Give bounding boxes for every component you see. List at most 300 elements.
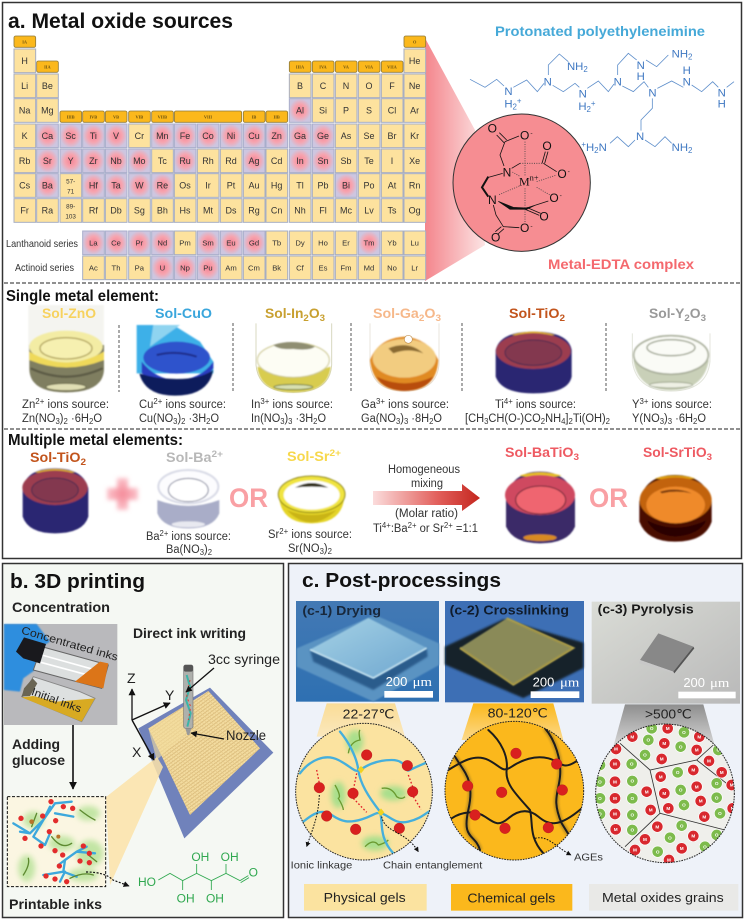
periodic table: Mn (156, 131, 169, 141)
arrow: inks to glucose step (72, 725, 74, 789)
legend: Chemical gels: Chemical gels (467, 891, 555, 905)
photo: concentrated and initial inks (4, 624, 120, 725)
periodic table: Ga (294, 131, 306, 141)
periodic table: P (343, 106, 349, 116)
periodic table: Fr (20, 206, 29, 216)
sample: Sol-Sr2+: Sol-Sr 2+ (287, 448, 342, 464)
circle: metal oxide grains: M (614, 747, 618, 752)
periodic table: Kr (410, 131, 419, 141)
coordinate axes: Z (127, 670, 136, 686)
sample: Sol-Ga2O3: Ga3+ ions source: (361, 397, 449, 411)
circle: metal oxide grains: M (666, 806, 670, 811)
circle: metal oxide grains (594, 723, 738, 866)
periodic table: Nb (110, 156, 122, 166)
legend: Physical gels (304, 884, 427, 911)
periodic table: As (341, 131, 352, 141)
circle: metal oxide grains: O (703, 844, 707, 849)
periodic table: V (113, 131, 119, 141)
circle: metal oxide grains: M (702, 814, 706, 819)
periodic table: Tc (158, 156, 167, 166)
periodic table: Dy (295, 239, 305, 248)
callout arrow: ionic linkage (307, 795, 319, 847)
legend: Physical gels: Physical gels (324, 891, 406, 905)
arrow: homogeneous mixing: Ti4+:Ba2+ or Sr2+ =1:1 (373, 521, 478, 535)
circle: metal oxide grains: O (647, 738, 651, 743)
chemical structure: polyethyleneimine: H2+ (504, 96, 522, 112)
periodic table: VIA (365, 65, 374, 70)
circle: metal oxide grains: O (630, 762, 634, 767)
periodic table: Tl (296, 181, 304, 191)
periodic table: Ca (42, 131, 53, 141)
periodic table: Mo (133, 156, 146, 166)
sample: Sol-ZnO: Sol-ZnO (42, 306, 96, 321)
photo c-2: crosslinking: μm (560, 675, 579, 690)
periodic table: Tb (272, 239, 281, 248)
circle: metal oxide grains: M (707, 759, 711, 764)
circle: metal oxide grains: O (598, 779, 602, 784)
periodic table: Ne (409, 81, 420, 91)
label: AGEs: AGEs (574, 853, 603, 864)
circle: metal oxide grains: M (731, 806, 735, 811)
sample: Sol-Y2O3: Sol-Y2O3 (649, 306, 706, 324)
circle: metal oxide grains: M (720, 770, 724, 775)
periodic table: Nd (157, 239, 167, 248)
label: Nozzle (191, 728, 266, 743)
label: Chain entanglement: Chain entanglement (383, 860, 482, 871)
arrow: homogeneous mixing (373, 464, 480, 535)
periodic table: Sb (340, 156, 351, 166)
icon: plus sign (107, 478, 138, 510)
periodic table: Mg (41, 106, 54, 116)
Metal-EDTA complex circle: N (503, 166, 511, 180)
legend: Chemical gels (451, 884, 572, 911)
periodic table: Fl (319, 206, 327, 216)
circle: metal oxide grains: M (643, 837, 647, 842)
chemical structure: polyethyleneimine: NH2 (672, 142, 692, 155)
sample: Sol-TiO2: [CH3CH(O-)CO2NH4]2Ti(OH)2 (465, 413, 610, 426)
periodic table: Sm (202, 239, 214, 248)
panel b: 3D printing (2, 564, 284, 918)
sample: Sol-In2O3: In(NO3)3 ·3H2O (251, 413, 326, 426)
periodic table: Al (296, 106, 304, 116)
circle: metal oxide grains: M (695, 748, 699, 753)
circle: metal oxide grains: O (717, 748, 721, 753)
subheading: Concentration: Concentration (12, 599, 110, 615)
periodic table: Re (157, 181, 168, 191)
circle: metal oxide grains: M (613, 762, 617, 767)
periodic table: Tm (363, 239, 375, 248)
callout arrow: chain entanglement (382, 817, 418, 852)
photo c-2: crosslinking (445, 601, 584, 702)
funnel: crosslinking (462, 703, 563, 740)
photo c-1: drying (296, 601, 439, 702)
sample: Sol-In2O3: Sol-In2O3 (265, 306, 325, 324)
circle: metal oxide grains: M (659, 774, 663, 779)
periodic table: IB (252, 114, 256, 119)
circle: metal oxide grains: O (676, 770, 680, 775)
periodic table: Os (179, 181, 191, 191)
photo: concentrated and initial inks: Concentrated inks (20, 625, 120, 664)
Metal-EDTA complex circle: - (560, 192, 562, 199)
periodic table: F (389, 81, 395, 91)
label: Lanthanoid series: Lanthanoid series (6, 238, 78, 250)
circle: metal oxide grains: O (631, 828, 635, 833)
subheading: Adding glucose: glucose (12, 752, 65, 768)
chemical structure: polyethyleneimine: N (683, 76, 691, 88)
periodic table: Hg (271, 181, 282, 191)
chemical structure: glucose: HO (138, 875, 156, 889)
periodic table: Lu (410, 239, 419, 248)
periodic table: Ba (42, 181, 53, 191)
sample: Sol-SrTiO3 (639, 445, 712, 542)
periodic table: Te (364, 156, 374, 166)
periodic table: VA (343, 65, 350, 70)
sample: Sol-SrTiO3: Sol-SrTiO3 (643, 445, 712, 463)
circle: metal oxide grains: O (682, 803, 686, 808)
sample: Sol-CuO: Cu(NO3)2 ·3H2O (139, 413, 219, 426)
periodic table: VIIB (158, 114, 167, 119)
chemical structure: glucose (138, 850, 258, 905)
photo c-1: drying: 200 (386, 674, 407, 689)
periodic table: VIB (135, 114, 143, 119)
Metal-EDTA complex circle: N (488, 193, 497, 207)
sample: Sol-TiO2 precursor (22, 450, 88, 533)
periodic table: W (135, 181, 144, 191)
periodic table: At (388, 181, 397, 191)
periodic table: 89- (66, 203, 75, 210)
periodic table: U (160, 264, 165, 273)
heading: a. Metal oxide sources: a. Metal oxide sources (8, 10, 233, 33)
periodic table: Mt (203, 206, 213, 216)
sample: Sol-Ba2+: Ba(NO3)2 (166, 544, 212, 557)
circle: metal oxide grains: M (691, 834, 695, 839)
periodic table: He (409, 56, 420, 66)
heading: Protonated polyethyleneimine: Protonated polyethyleneimine (495, 23, 705, 39)
circle: metal oxide grains: M (613, 779, 617, 784)
periodic table: Cd (271, 156, 282, 166)
periodic table funnel (425, 38, 485, 281)
photo c-2: crosslinking: 200 (533, 675, 554, 690)
periodic table: VIIA (387, 65, 398, 70)
callout arrow: AGEs (535, 838, 571, 855)
circle: metal oxide grains: M (666, 726, 670, 731)
periodic table: Es (319, 264, 328, 273)
Metal-EDTA complex circle: O (557, 167, 567, 181)
circle: metal oxide grains: O (679, 744, 683, 749)
periodic table: Au (248, 181, 259, 191)
periodic table: Hs (180, 206, 191, 216)
circle: metal oxide grains: O (631, 796, 635, 801)
photo c-3: pyrolysis (SEM): (c-3) Pyrolysis (598, 602, 694, 617)
label: Actinoid series: Actinoid series (15, 262, 74, 274)
label: Metal-EDTA complex: Metal-EDTA complex (548, 256, 694, 272)
periodic table: Th (112, 264, 120, 273)
periodic table: IIA (44, 65, 51, 70)
panel a: metal oxide sources (2, 2, 742, 558)
sample: Sol-ZnO (22, 305, 109, 426)
Metal-EDTA complex circle: - (568, 168, 570, 175)
periodic table: Si (319, 106, 327, 116)
periodic table: Li (21, 81, 28, 91)
subheading: Direct ink writing: Direct ink writing (133, 625, 246, 641)
sample: Sol-Ga2O3 (361, 306, 449, 426)
chemical structure: glucose: OH (206, 891, 224, 905)
chemical structure: polyethyleneimine: N (504, 86, 513, 98)
periodic table: IIIA (296, 65, 305, 70)
sample: Sol-In2O3 (251, 306, 333, 426)
periodic table: I (391, 156, 393, 166)
Metal-EDTA complex circle: Mn+ (519, 174, 539, 188)
periodic table: Y (68, 156, 74, 166)
periodic table: Hf (89, 181, 98, 191)
circle: physical gels network (296, 723, 432, 860)
arrow: homogeneous mixing: Homogeneous (388, 464, 460, 476)
chemical structure: glucose: OH (221, 850, 239, 864)
panel c: post-processings (288, 564, 742, 918)
periodic table: Po (363, 181, 374, 191)
periodic table: K (22, 131, 28, 141)
Metal-EDTA complex circle: O (491, 230, 500, 244)
temperature: 22-27℃: 22-27℃ (343, 706, 394, 721)
label: Printable inks: Printable inks (9, 896, 102, 912)
periodic table: Pt (227, 181, 236, 191)
periodic table: Rg (248, 206, 260, 216)
periodic table: Rh (202, 156, 214, 166)
periodic table: IIB (274, 114, 280, 119)
periodic table: La (89, 239, 98, 248)
periodic table: Gd (249, 239, 259, 248)
periodic table: N (343, 81, 349, 91)
dotted arrow to glucose (86, 872, 129, 886)
periodic table: 57- (66, 178, 75, 185)
sample: Sol-Ga2O3: Ga(NO3)3 ·8H2O (361, 413, 442, 426)
periodic table: Bh (157, 206, 168, 216)
circle: metal oxide grains: M (613, 796, 617, 801)
chemical structure: polyethyleneimine: NH2 (672, 48, 692, 62)
chemical structure: polyethyleneimine: N (718, 88, 726, 100)
sample: Sol-Sr2+: Sr2+ ions source: (268, 527, 352, 541)
circle: metal oxide grains: O (656, 849, 660, 854)
coordinate axes (127, 670, 175, 760)
periodic table: Cu (248, 131, 260, 141)
legend: Metal oxides grains: Metal oxides grains (602, 891, 724, 905)
photo c-3: pyrolysis (SEM): μm (710, 675, 729, 690)
circle: metal oxide grains: O (715, 833, 719, 838)
sample: Sol-Ba2+ (146, 449, 231, 557)
sample: Sol-Ba2+: Ba2+ ions source: (146, 529, 231, 543)
periodic table: Rn (409, 181, 420, 191)
Metal-EDTA complex circle (453, 114, 590, 251)
label: 3cc syringe (186, 652, 280, 692)
arrow: homogeneous mixing: mixing (411, 478, 443, 490)
Metal-EDTA complex circle: O (539, 210, 549, 224)
periodic table: Db (110, 206, 122, 216)
periodic table: Rf (89, 206, 98, 216)
periodic table: Ce (111, 239, 121, 248)
periodic table: 103 (65, 213, 76, 220)
periodic table: Zn (271, 131, 282, 141)
periodic table: Ru (179, 156, 191, 166)
circle: metal oxide grains: M (680, 846, 684, 851)
legend: Metal oxides grains (589, 884, 738, 911)
chemical structure: polyethyleneimine: H (718, 98, 726, 110)
chemical structure: polyethyleneimine: N (637, 60, 645, 72)
sample: Sol-ZnO: Zn(NO3)2 ·6H2O (22, 413, 102, 426)
periodic table: Rb (19, 156, 30, 166)
circle: metal oxide grains: M (633, 848, 637, 853)
periodic table: Nh (294, 206, 306, 216)
periodic table: Sr (43, 156, 52, 166)
periodic table: Sc (65, 131, 76, 141)
sample: Sol-Y2O3: Y(NO3)3 ·6H2O (632, 413, 706, 426)
Metal-EDTA complex circle: O (520, 128, 529, 142)
circle: metal oxide grains: O (715, 795, 719, 800)
periodic table: Pa (135, 264, 145, 273)
chemical structure: polyethyleneimine: H (637, 71, 645, 83)
periodic table: Bk (272, 264, 281, 273)
photo c-3: pyrolysis (SEM): 200 (683, 675, 705, 690)
syringe (184, 665, 193, 735)
periodic table: Be (42, 81, 53, 91)
periodic table: Fm (340, 264, 352, 273)
circle: metal oxide grains: M (614, 827, 618, 832)
subheading: Adding glucose: Adding (12, 736, 60, 752)
label: Nozzle: Nozzle (226, 728, 266, 743)
periodic table: Sn (317, 156, 328, 166)
periodic table: Lv (364, 206, 374, 216)
periodic table: Ar (410, 106, 419, 116)
circle: metal oxide grains: O (682, 730, 686, 735)
circle: metal oxide grains: O (631, 813, 635, 818)
sample: Sol-Ba2+: Sol-Ba 2+ (166, 449, 224, 465)
temperature: >500℃: >500℃ (645, 706, 692, 721)
sample: Sol-Ga2O3: Sol-Ga2O3 (373, 306, 441, 324)
periodic table: Lr (411, 264, 419, 273)
circle: chemical gels network (445, 721, 584, 860)
Metal-EDTA complex circle: O (488, 121, 497, 135)
periodic table: In (296, 156, 304, 166)
periodic table: Og (409, 206, 421, 216)
circle: metal oxide grains: O (679, 788, 683, 793)
Metal-EDTA complex circle: - (530, 223, 533, 230)
sample: Sol-CuO: Cu2+ ions source: (139, 397, 226, 411)
circle: metal oxide grains: O (631, 779, 635, 784)
sample: Sol-CuO (137, 306, 226, 426)
periodic table: Rd (225, 156, 237, 166)
periodic table: Xe (409, 156, 420, 166)
chemical structure: polyethyleneimine: N (579, 88, 587, 100)
periodic table: Ti (90, 131, 97, 141)
printed lattice on substrate (138, 688, 273, 838)
circle: metal oxide grains: M (662, 741, 666, 746)
coordinate axes: Y (165, 687, 175, 703)
periodic table: Sg (134, 206, 145, 216)
periodic table: Pr (136, 239, 144, 248)
sample: Sol-Y2O3: Y3+ ions source: (632, 397, 712, 411)
sample: Sol-Sr2+ (268, 448, 352, 556)
chemical structure: polyethyleneimine (470, 48, 734, 155)
periodic table: IVB (89, 114, 97, 119)
periodic table: VB (113, 114, 119, 119)
periodic table: H (21, 56, 28, 66)
arrow: homogeneous mixing: (Molar ratio) (395, 508, 458, 520)
periodic table: Se (363, 131, 374, 141)
text: OR: OR (229, 483, 268, 513)
chemical structure: glucose: O (249, 866, 258, 880)
periodic table: Fe (180, 131, 190, 141)
circle: metal oxide grains: O (668, 835, 672, 840)
periodic table: Ag (248, 156, 259, 166)
chemical structure: glucose: OH (191, 850, 209, 864)
funnel: pyrolysis (613, 704, 715, 747)
periodic table: Pu (203, 264, 213, 273)
connection wedge to printable inks (106, 757, 163, 885)
chemical structure: polyethyleneimine: N (614, 76, 622, 88)
periodic table: Ta (111, 181, 121, 191)
periodic table: Cn (271, 206, 282, 216)
circle: metal oxide grains: O (598, 763, 602, 768)
temperature: 80-120℃: 80-120℃ (488, 705, 548, 720)
periodic table: Md (364, 264, 374, 273)
sample: Sol-Y2O3 (632, 306, 712, 426)
circle: metal oxide grains: O (598, 812, 602, 817)
periodic table: 71 (67, 188, 75, 195)
Metal-EDTA complex circle: O (542, 139, 552, 153)
periodic table: Eu (226, 239, 236, 248)
periodic table: Ni (227, 131, 235, 141)
periodic table: Yb (387, 239, 397, 248)
circle: metal oxide grains: M (695, 784, 699, 789)
sample: Sol-Sr2+: Sr(NO3)2 (288, 543, 332, 556)
sample: Sol-TiO2: Sol-TiO 2 (509, 306, 565, 324)
circle: metal oxide grains: M (699, 799, 703, 804)
heading: Single metal element: Single metal element: (6, 288, 159, 305)
circle: metal oxide grains: M (645, 789, 649, 794)
sample: Sol-TiO2 (465, 306, 610, 426)
sample: Sol-TiO2 precursor: Sol-TiO 2 (30, 450, 86, 468)
circle: metal oxide grains: O (718, 811, 722, 816)
periodic table: Am (225, 264, 237, 273)
chemical structure: polyethyleneimine: +H2N (581, 140, 607, 155)
circle: metal oxide grains: M (613, 812, 617, 817)
heading: c. Post-processings: c. Post-processings (302, 570, 501, 592)
sample: Sol-ZnO: Zn2+ ions source: (22, 397, 109, 411)
periodic table: Cr (135, 131, 144, 141)
periodic table: Ra (42, 206, 53, 216)
periodic table: IA (22, 40, 28, 45)
photo c-2: crosslinking: (c-2) Crosslinking (450, 602, 569, 617)
subheading: Adding glucose (12, 736, 65, 768)
circle: metal oxide grains: O (650, 726, 654, 731)
periodic table: Ts (388, 206, 397, 216)
periodic table (14, 36, 426, 280)
circle: metal oxide grains: M (655, 824, 659, 829)
circle: metal oxide grains: O (680, 823, 684, 828)
circle: metal oxide grains: O (715, 781, 719, 786)
periodic table: Pm (179, 239, 191, 248)
coordinate axes: X (132, 744, 142, 760)
periodic table: IIIB (67, 114, 75, 119)
funnel: drying (317, 703, 405, 737)
sample: Sol-BaTiO3: Sol-BaTiO 3 (505, 445, 579, 463)
heading: b. 3D printing: b. 3D printing (10, 571, 145, 593)
chemical structure: polyethyleneimine: H (683, 65, 691, 77)
Metal-EDTA complex circle: O (520, 221, 529, 235)
sample: Sol-BaTiO3 (505, 445, 579, 543)
sample: Sol-In2O3: In3+ ions source: (251, 397, 333, 411)
circle: metal oxide grains: M (667, 858, 671, 863)
sample: Sol-TiO2: Ti4+ ions source: (495, 397, 576, 411)
